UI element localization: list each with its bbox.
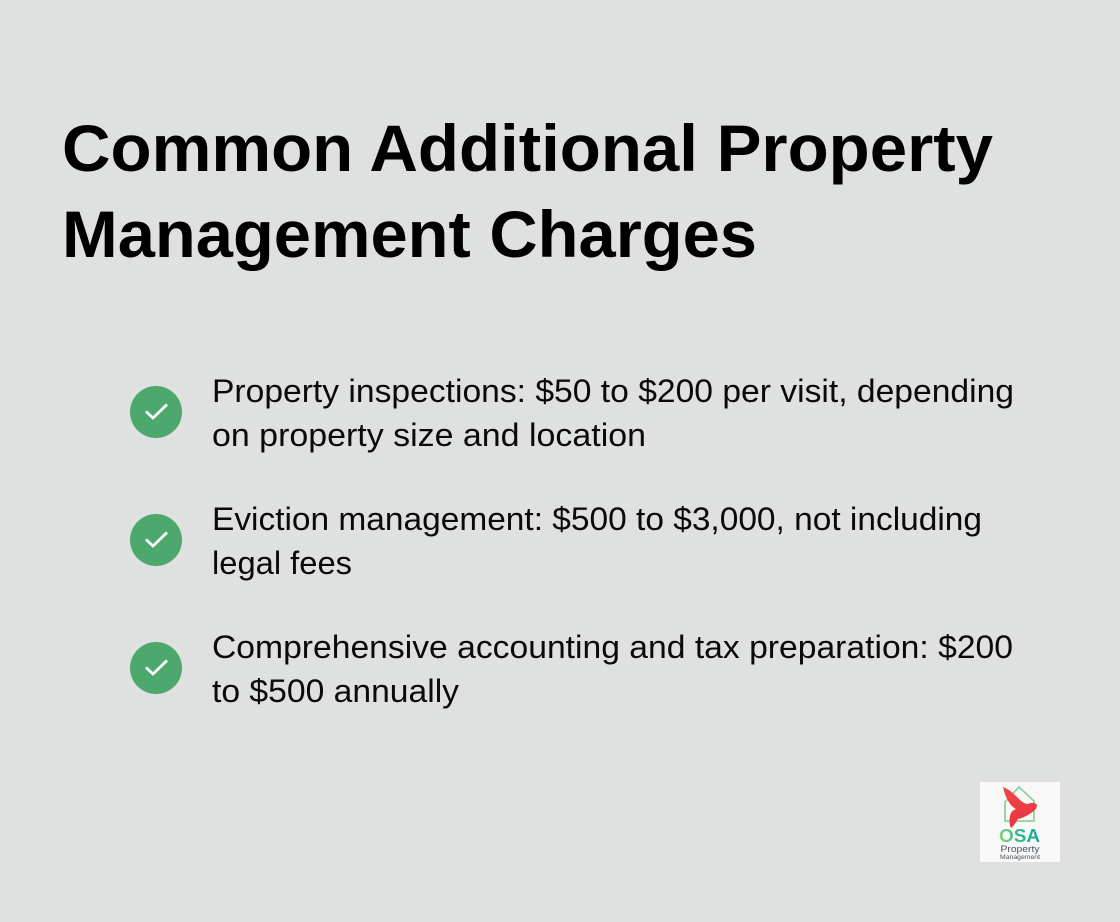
text: property inspections: Property inspections: $50 to $200 per visit, depending [212,373,1014,409]
text: property inspections: on property size and location [212,417,646,453]
text: eviction management: Eviction management: $500 to $3,000, not including [212,501,982,537]
text: eviction management [212,501,982,581]
icon: check mark [130,642,182,694]
icon: check mark [130,386,182,438]
icon: house outline [1005,787,1034,821]
title: Common Additional Property [62,111,993,185]
list item: property inspections [130,373,1014,453]
text: accounting and tax preparation [212,629,1013,709]
text: accounting and tax preparation: Comprehensive accounting and tax preparation: $200 [212,629,1013,665]
title [62,111,993,271]
logo tagline: Property [1000,844,1040,854]
list item: accounting and tax preparation [130,629,1013,709]
text: accounting and tax preparation: to $500 annually [212,673,460,709]
logo wordmark: OSA [999,826,1040,846]
icon: check mark [130,514,182,566]
logo: OSA Property Management [980,782,1060,862]
icon: red bird [1003,787,1037,828]
text: eviction management: legal fees [212,545,352,581]
list item: eviction management [130,501,982,581]
logo tagline [1000,844,1040,861]
logo tagline: Management [1000,854,1040,861]
title: Management Charges [62,197,757,271]
text: property inspections [212,373,1014,453]
